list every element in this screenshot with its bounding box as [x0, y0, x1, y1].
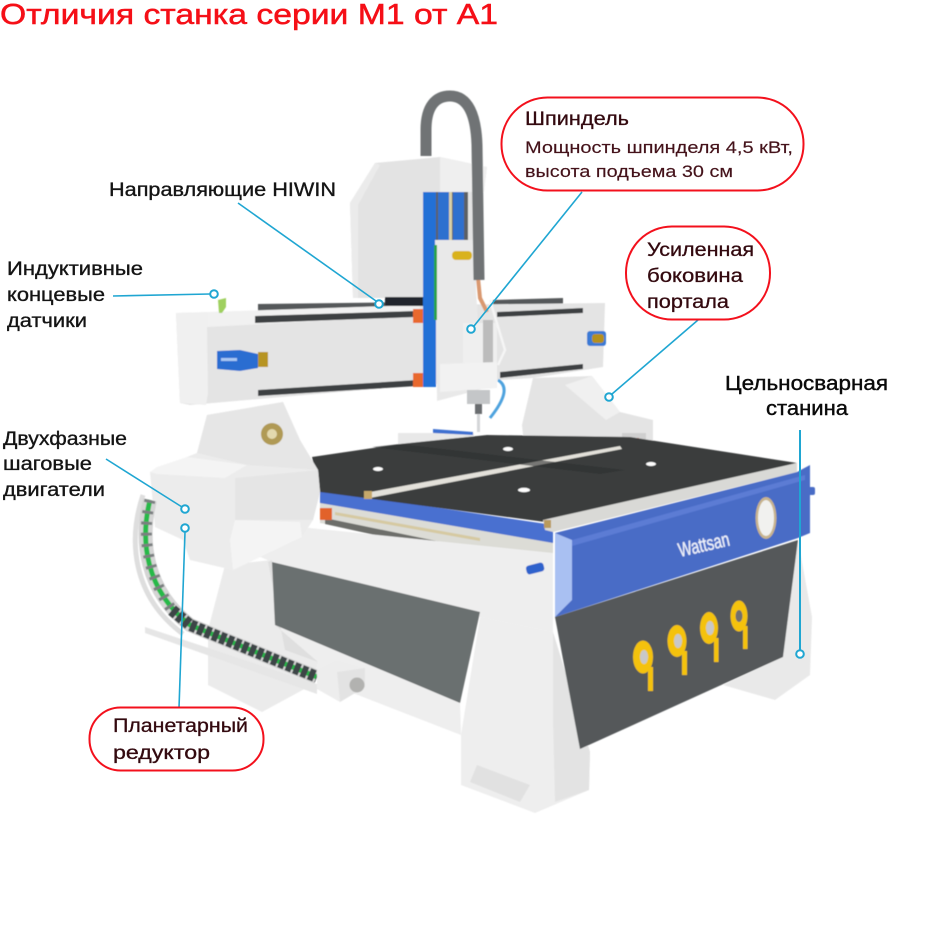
left gantry leg and motor cover — [150, 402, 320, 570]
callout: reinforced portal side — [626, 226, 770, 320]
label: welded frame: Цельносварная — [725, 373, 888, 395]
leader line: HIWIN — [238, 203, 383, 308]
right gantry leg — [522, 376, 653, 445]
label: HIWIN guides: Направляющие HIWIN — [109, 179, 336, 201]
label: welded frame — [725, 373, 888, 420]
leader line: planetary gearbox — [179, 524, 189, 708]
machine table — [312, 435, 797, 522]
label: inductive sensors: Индуктивные — [7, 258, 143, 280]
z column — [423, 192, 497, 401]
leader line: frame — [796, 430, 804, 658]
cable chain and tray — [135, 495, 317, 694]
silver front edge — [543, 463, 797, 532]
gantry back plate — [350, 157, 487, 298]
callout: spindle: Мощность шпинделя 4,5 кВт, — [525, 138, 793, 157]
label: inductive sensors — [7, 258, 143, 332]
leader line: sensors — [113, 290, 218, 298]
label: inductive sensors: датчики — [7, 310, 87, 332]
sensor — [218, 298, 226, 313]
frame side beam — [240, 527, 553, 735]
side rail and blue bar — [320, 490, 553, 560]
leader line: stepper motors — [106, 459, 189, 513]
callout: planetary gearbox: редуктор — [113, 742, 210, 764]
logo: Wattsan — [676, 529, 732, 562]
rear left leg — [208, 560, 318, 712]
motor on right beam end — [587, 331, 606, 346]
gauge — [756, 497, 776, 539]
callout: spindle — [502, 98, 804, 190]
chain end block — [317, 660, 365, 702]
illustration: CNC machine — [135, 96, 815, 813]
callout: reinforced portal side: портала — [647, 291, 729, 313]
callout: spindle: Шпиндель — [525, 108, 629, 130]
spindle — [440, 278, 505, 432]
gantry beam — [176, 297, 605, 405]
label: inductive sensors: концевые — [7, 284, 105, 306]
rear right table leg — [723, 540, 812, 700]
callout: reinforced portal side: боковина — [647, 265, 743, 287]
label: welded frame: станина — [766, 398, 849, 420]
skirt panel — [555, 540, 798, 749]
cable hose — [426, 96, 479, 280]
leader line: portal side — [605, 320, 698, 401]
callout: planetary gearbox: Планетарный — [113, 715, 248, 737]
grey side panel — [272, 562, 480, 703]
blue knob on far side — [808, 487, 815, 495]
motor on beam — [217, 350, 268, 371]
callout: planetary gearbox — [90, 708, 264, 770]
rear plate behind table — [398, 429, 474, 447]
label: two-phase stepper motors — [3, 428, 127, 501]
front blue band — [555, 465, 810, 617]
label: two-phase stepper motors: шаговые — [3, 453, 92, 475]
yellow valves — [633, 600, 748, 691]
front leg — [461, 617, 590, 813]
label: two-phase stepper motors: двигатели — [3, 479, 105, 501]
label: two-phase stepper motors: Двухфазные — [3, 428, 127, 450]
callout: spindle: высота подъема 30 см — [525, 162, 733, 181]
blue knob — [525, 562, 545, 575]
callout: reinforced portal side: Усиленная — [647, 239, 754, 261]
leader line: spindle — [467, 192, 582, 333]
